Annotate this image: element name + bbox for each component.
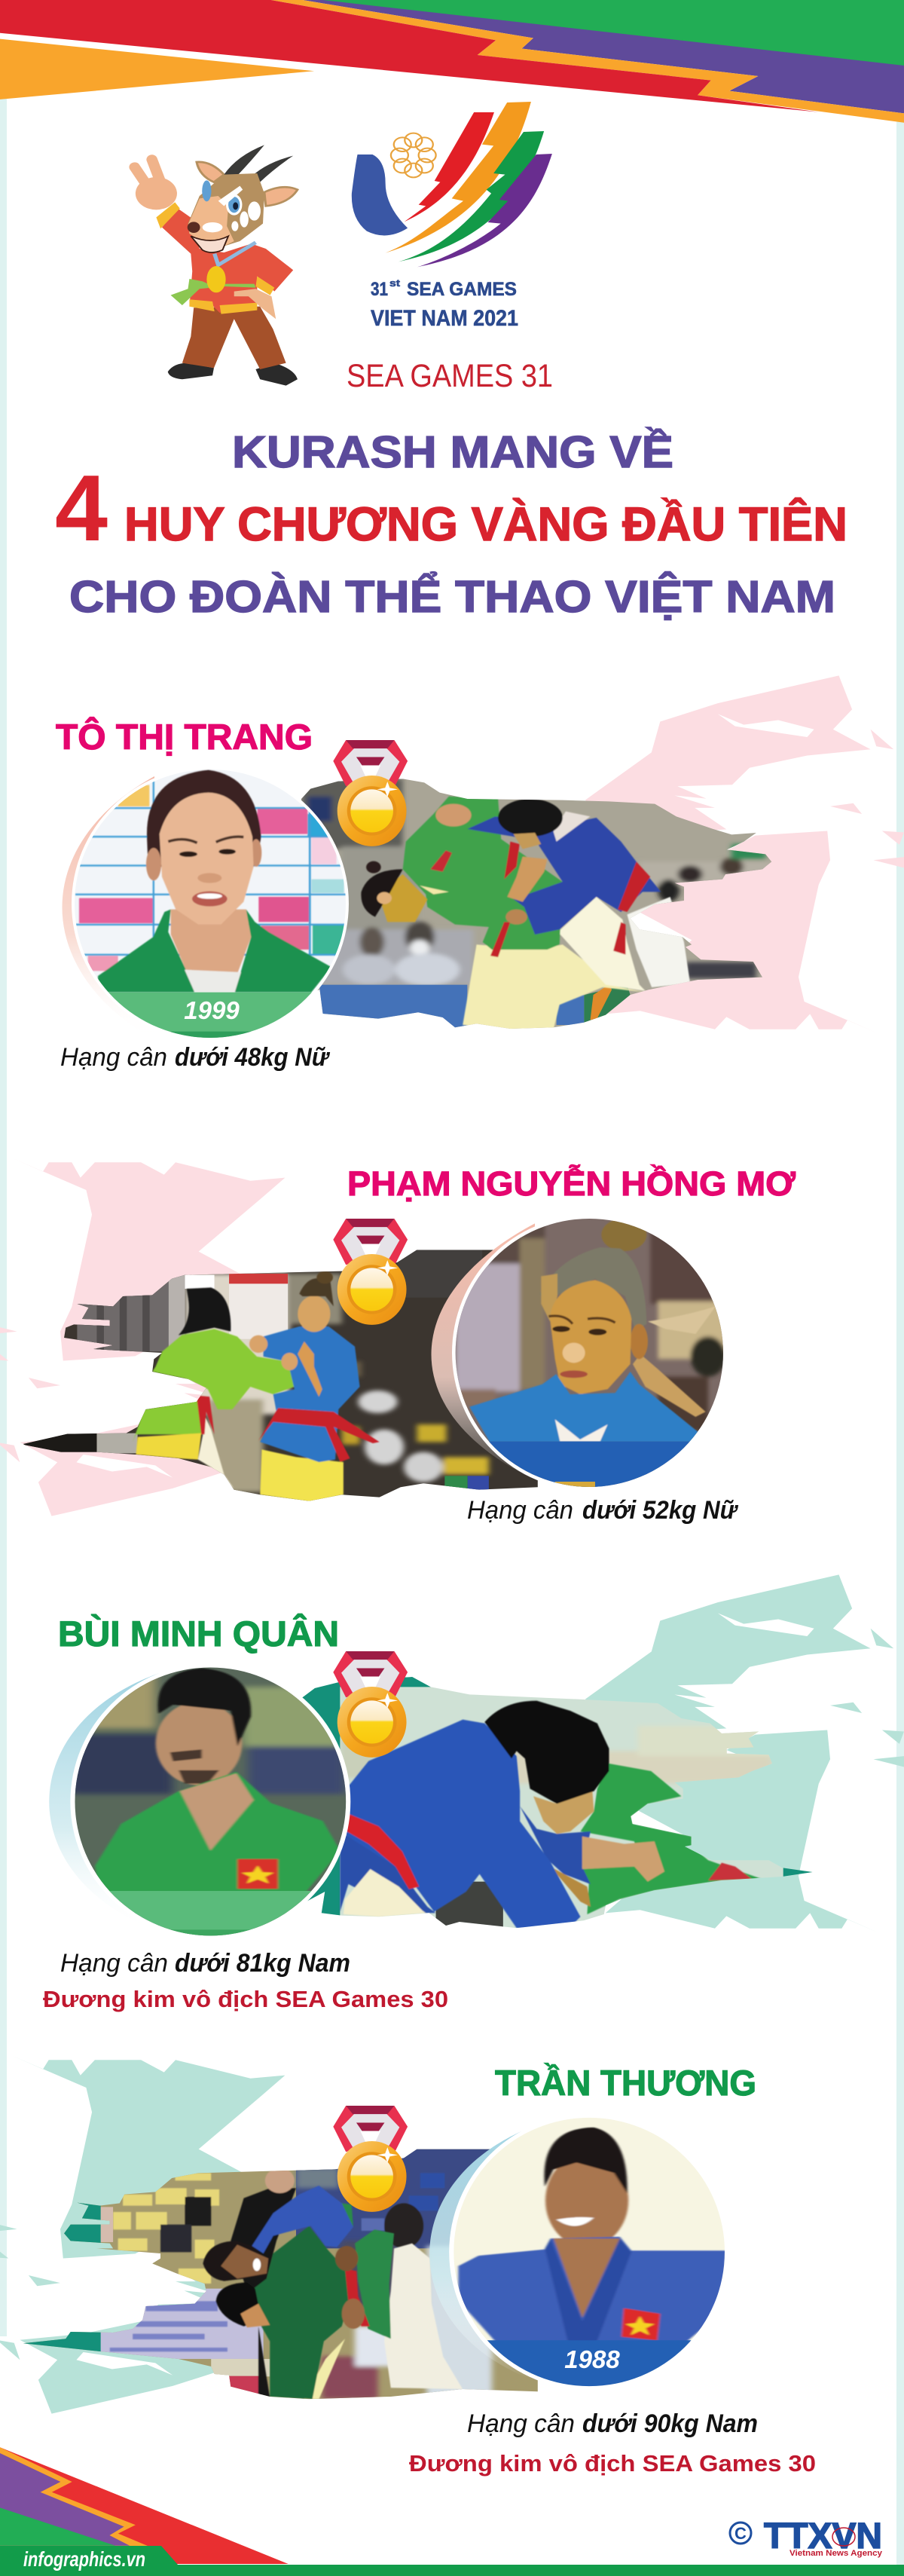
logo: SEA Games 31 emblem: SEA GAMES bbox=[407, 279, 517, 300]
name: PHẠM NGUYỄN HỒNG MƠ bbox=[347, 1164, 796, 1203]
name: TÔ THỊ TRANG bbox=[56, 717, 313, 757]
background splash pink bbox=[585, 675, 904, 1034]
weight class bbox=[60, 1043, 330, 1072]
panel: Phạm Nguyễn Hồng Mơ bbox=[0, 1158, 796, 1525]
panel: Tô Thị Trang bbox=[56, 675, 904, 1072]
weight class: dưới 81kg Nam bbox=[175, 1949, 350, 1978]
name: TRẦN THƯƠNG bbox=[495, 2063, 756, 2103]
background splash teal bbox=[585, 1574, 904, 1933]
weight class: Hạng cân bbox=[60, 1949, 168, 1978]
title: CHO ĐOÀN THỂ THAO VIỆT NAM bbox=[69, 571, 835, 622]
header ribbon banner bbox=[0, 0, 904, 123]
logo: SEA Games 31 emblem: st bbox=[389, 277, 401, 289]
weight class bbox=[467, 1496, 739, 1525]
birth year 1988: 1988 bbox=[564, 2345, 620, 2373]
weight class: Hạng cân bbox=[60, 1043, 167, 1072]
title: HUY CHƯƠNG VÀNG ĐẦU TIÊN bbox=[124, 497, 848, 551]
logo: SEA Games 31 emblem bbox=[352, 102, 552, 331]
action photo 1 bbox=[301, 779, 771, 1029]
weight class: dưới 52kg Nữ bbox=[582, 1496, 739, 1525]
logo: TTXVN: C bbox=[734, 2524, 747, 2543]
logo: TTXVN: TTXVN bbox=[764, 2516, 882, 2556]
portrait: Trần Thương bbox=[429, 2114, 732, 2391]
source label: infographics.vn: infographics.vn bbox=[23, 2547, 145, 2571]
logo: SEA Games 31 emblem: 31 bbox=[371, 279, 388, 300]
reigning champion note: Đương kim vô địch SEA Games 30 bbox=[409, 2450, 816, 2477]
portrait: Bùi Minh Quân bbox=[49, 1663, 352, 1941]
weight class bbox=[467, 2409, 758, 2438]
panel: Bùi Minh Quân bbox=[43, 1574, 904, 2012]
subtitle: SEA GAMES 31: SEA GAMES 31 bbox=[347, 358, 553, 394]
medal bbox=[333, 2106, 408, 2212]
panel: Trần Thương bbox=[0, 2055, 816, 2477]
medal bbox=[333, 1219, 408, 1325]
weight class bbox=[60, 1949, 350, 1978]
background splash pink bbox=[0, 1158, 305, 1516]
reigning champion note: Đương kim vô địch SEA Games 30 bbox=[43, 1986, 448, 2012]
weight class: Hạng cân bbox=[467, 1496, 573, 1525]
action photo 4 bbox=[23, 2149, 538, 2400]
action photo 2 bbox=[23, 1250, 538, 1501]
weight class: dưới 48kg Nữ bbox=[175, 1043, 330, 1072]
medal bbox=[333, 1651, 408, 1758]
weight class: Hạng cân bbox=[467, 2409, 575, 2438]
source label: infographics.vn bbox=[0, 2546, 904, 2576]
title: KURASH MANG VỀ bbox=[232, 427, 673, 477]
medal bbox=[333, 740, 408, 846]
footer ribbon bbox=[0, 2447, 289, 2564]
weight class: dưới 90kg Nam bbox=[582, 2409, 758, 2438]
mascot bbox=[135, 145, 298, 386]
logo: SEA Games 31 emblem: VIET NAM 2021 bbox=[371, 306, 518, 331]
portrait: Tô Thị Trang bbox=[62, 766, 352, 1042]
birth year 1999: 1999 bbox=[184, 996, 240, 1024]
action photo 3 bbox=[302, 1677, 812, 1928]
title: 4 bbox=[55, 457, 108, 561]
title bbox=[55, 427, 848, 622]
name: BÙI MINH QUÂN bbox=[58, 1614, 339, 1654]
background splash teal bbox=[0, 2055, 305, 2414]
portrait: Phạm Nguyễn Hồng Mơ bbox=[432, 1215, 728, 1492]
logo: TTXVN: Vietnam News Agency bbox=[789, 2549, 883, 2558]
